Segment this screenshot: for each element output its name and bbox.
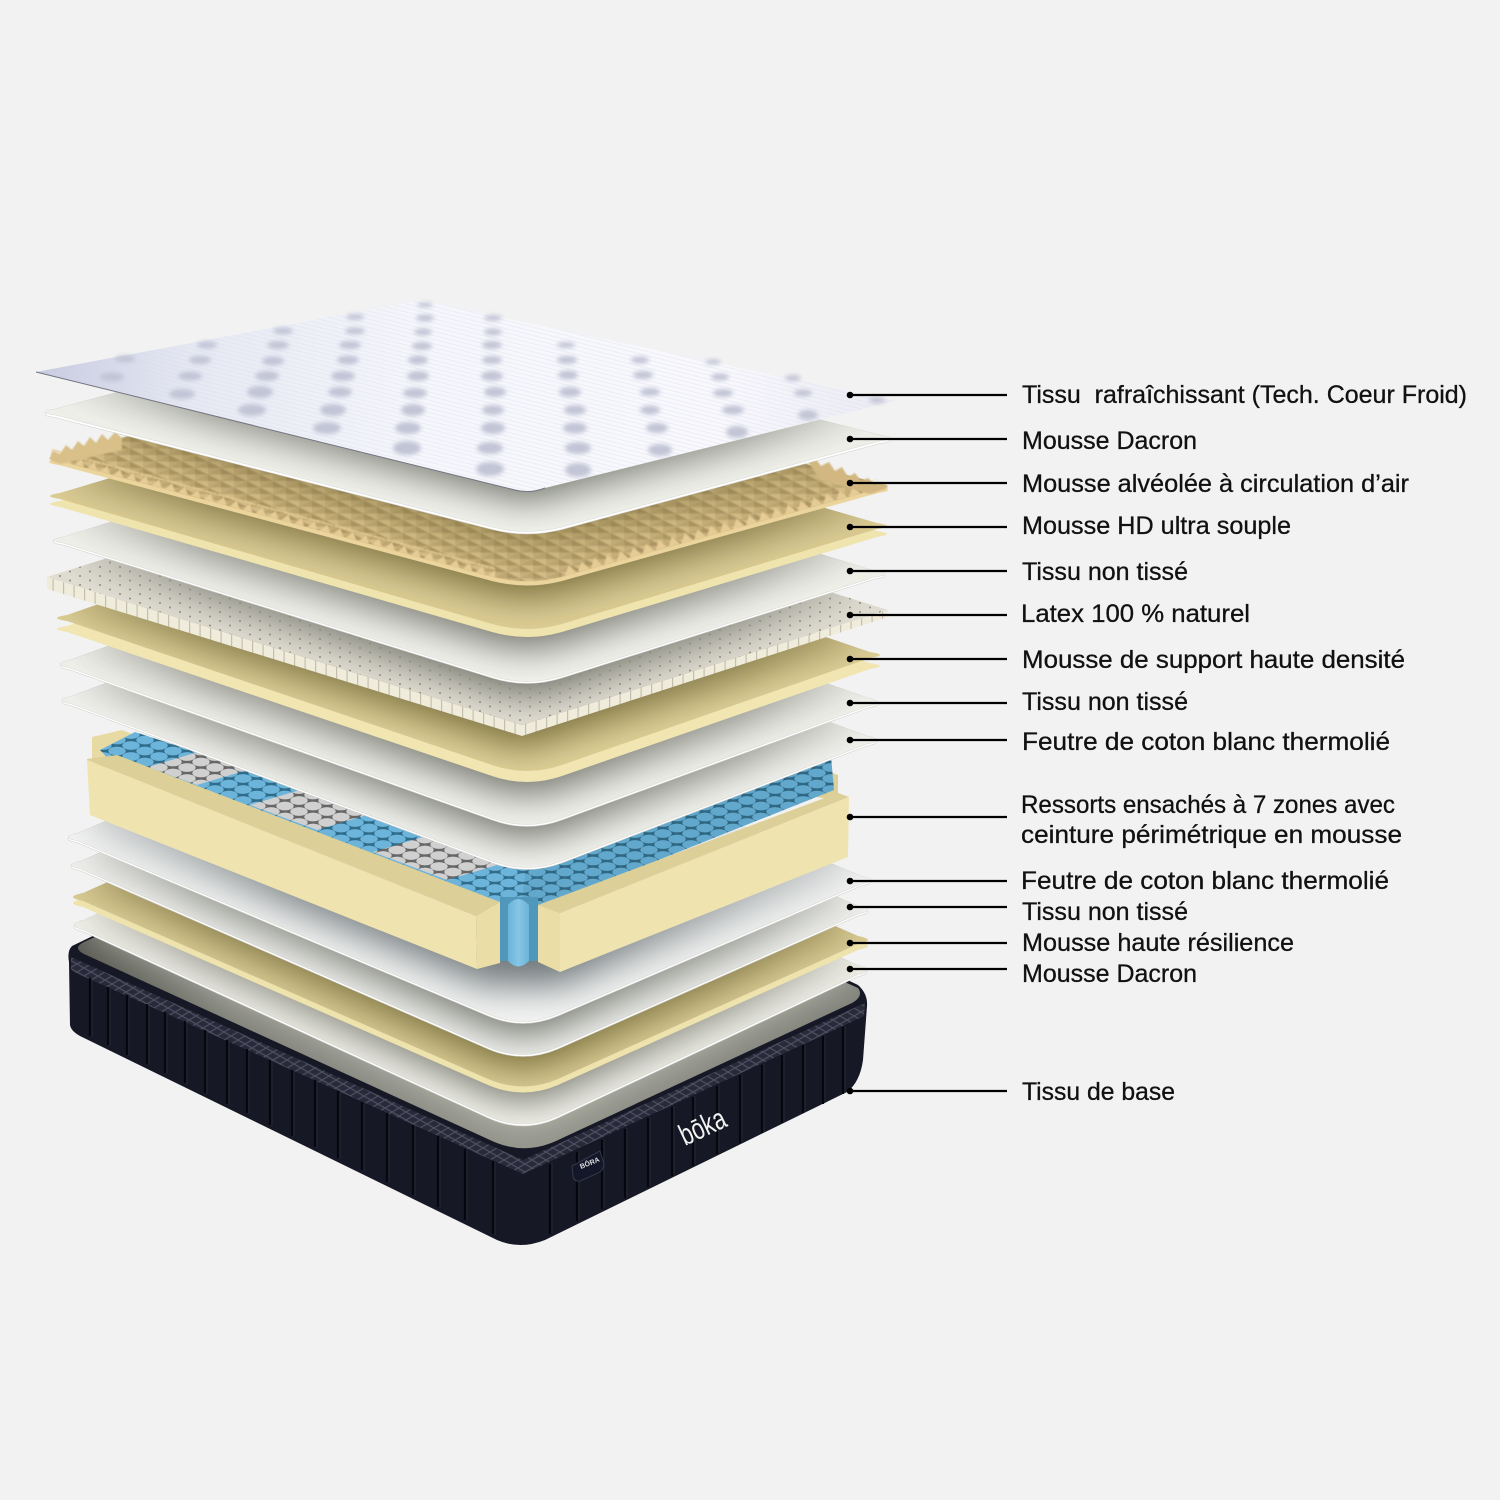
layer: Tissu rafraîchissant top fabric — [36, 300, 895, 492]
labels: Tissu de base — [1022, 1078, 1175, 1106]
base silhouette — [68, 778, 867, 1245]
layer: Mousse de support haute densité — [57, 598, 880, 782]
labels: Ressorts ensachés à 7 zones avec — [1021, 791, 1395, 819]
labels — [1021, 381, 1467, 1106]
leader lines and dots — [847, 392, 1007, 1094]
fabric surface — [36, 300, 895, 492]
latex surface — [47, 462, 888, 725]
layer: base mattress (Tissu de base) — [68, 936, 868, 1245]
labels: Mousse haute résilience — [1022, 929, 1294, 957]
spring strip blue — [100, 732, 527, 917]
left foam block — [87, 755, 500, 916]
layer: Feutre de coton blanc thermolié (lower) — [68, 807, 872, 1024]
brand logo: bōka — [674, 1102, 732, 1152]
spring strip grey zones — [148, 749, 257, 785]
labels: Mousse HD ultra souple — [1022, 512, 1291, 540]
labels: Latex 100 % naturel — [1021, 600, 1250, 628]
labels: Tissu non tissé — [1022, 898, 1188, 926]
layer: Mousse haute résilience — [73, 882, 868, 1092]
layer: Latex 100 % naturel — [47, 558, 888, 736]
layer: Tissu non tissé (upper) — [52, 522, 886, 684]
labels: Tissu rafraîchissant (Tech. Coeur Froid) — [1022, 381, 1467, 409]
layer: pocket springs with foam perimeter — [87, 730, 849, 972]
base top surface — [78, 790, 860, 1148]
labels: Tissu non tissé — [1022, 688, 1188, 716]
layer: Tissu non tissé (lower) — [70, 852, 868, 1057]
product tag — [572, 1151, 604, 1181]
layer: Mousse Dacron (bottom) — [74, 914, 868, 1126]
labels: Tissu non tissé — [1022, 558, 1188, 586]
infographic: mattress exploded view — [36, 300, 1466, 1245]
fabric lower edge — [36, 372, 545, 492]
corner spring column — [500, 897, 538, 961]
layer: Mousse Dacron (top) — [44, 392, 890, 534]
product tag: BŌRA — [579, 1156, 601, 1171]
quilting dimples — [100, 302, 885, 477]
labels: ceinture périmétrique en mousse — [1021, 821, 1402, 849]
latex perforated edge — [47, 577, 888, 736]
right foam block — [538, 793, 849, 913]
labels: Feutre de coton blanc thermolié — [1022, 728, 1390, 756]
labels: Mousse de support haute densité — [1022, 646, 1405, 674]
layer: Mousse HD ultra souple — [50, 478, 887, 637]
pleats — [90, 978, 843, 1234]
labels: Mousse Dacron — [1022, 960, 1197, 988]
foam teeth along front edges — [52, 449, 495, 578]
layer: Tissu non tissé (middle) — [60, 646, 878, 827]
labels: Mousse alvéolée à circulation d’air — [1022, 470, 1409, 498]
back foam corners — [92, 730, 160, 770]
quilted band — [71, 957, 865, 1174]
layer: Mousse alvéolée à circulation d'air — [49, 433, 888, 586]
layer: Feutre de coton blanc thermolié (upper) — [62, 683, 878, 870]
labels: Feutre de coton blanc thermolié — [1021, 867, 1389, 895]
labels: Mousse Dacron — [1022, 427, 1197, 455]
